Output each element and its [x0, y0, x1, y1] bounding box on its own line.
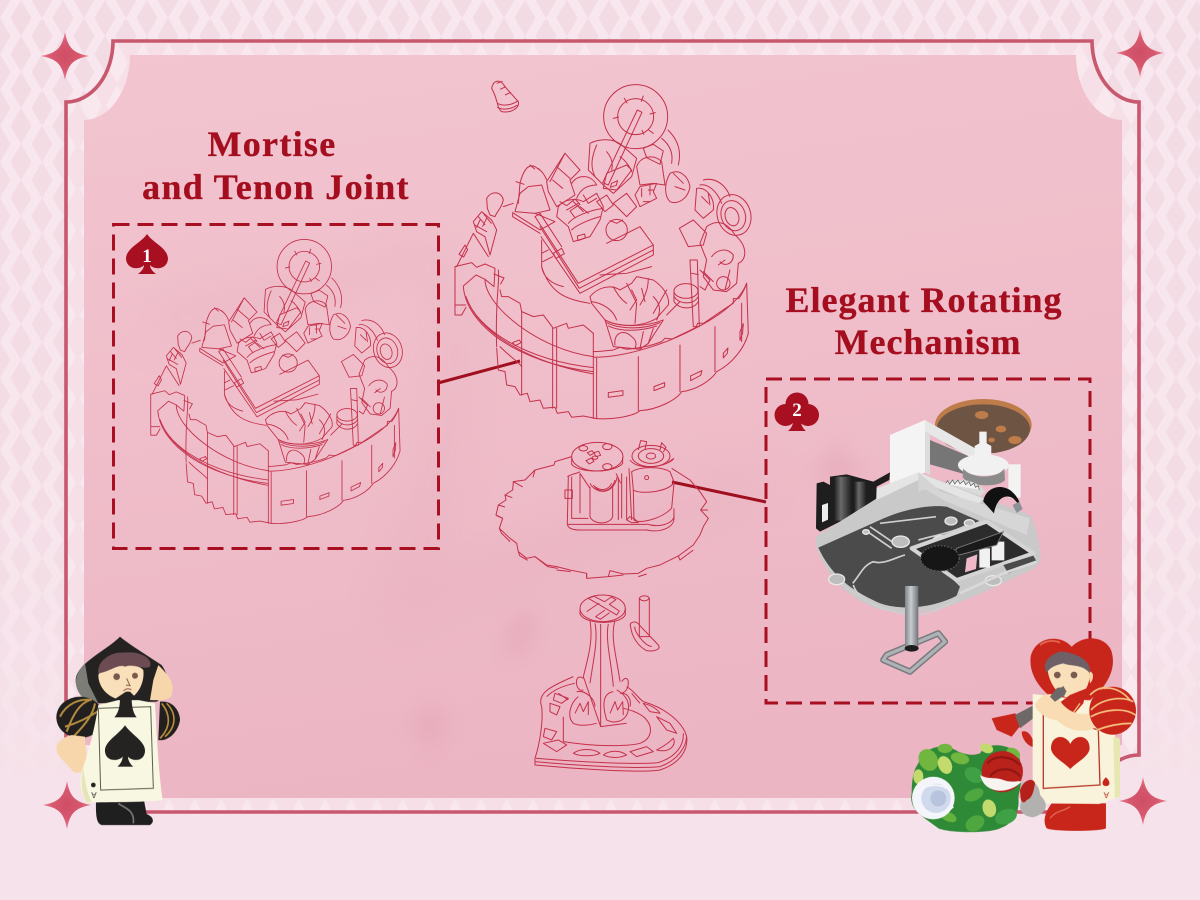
cross-top stem	[580, 595, 625, 622]
window	[912, 522, 1033, 580]
arms	[1035, 694, 1097, 731]
handle	[639, 596, 649, 637]
heading: Mortise and Tenon Joint	[142, 124, 410, 207]
heart base	[535, 677, 687, 771]
card heart	[1051, 737, 1090, 769]
badge: club 2: 2	[792, 400, 802, 421]
face	[1047, 661, 1090, 699]
frame outline	[66, 41, 1139, 812]
exploded model: top assembly line art	[455, 81, 756, 419]
comb frame and gears	[567, 472, 648, 530]
card ace mark	[1103, 777, 1109, 799]
crown gear	[943, 480, 985, 500]
white rose	[912, 777, 955, 819]
small floating part	[492, 81, 519, 112]
badge: spade 1: 1	[142, 246, 152, 267]
main frame	[816, 472, 1041, 613]
face	[98, 665, 144, 700]
zoomed line art of assembled ring	[151, 239, 407, 523]
base plate dark	[818, 506, 979, 607]
scalloped plate	[496, 457, 708, 578]
small ace mark	[91, 783, 97, 799]
spring barrel	[632, 468, 674, 492]
badge: spade 1	[126, 234, 168, 274]
right sleeve	[158, 701, 180, 740]
dashed box 2	[766, 379, 1090, 703]
plate light details	[830, 517, 970, 615]
puffed sleeve	[1089, 687, 1136, 735]
brown disc	[935, 399, 1032, 451]
mechanism illustration	[816, 399, 1041, 672]
winding key	[883, 586, 945, 672]
white post	[1008, 464, 1021, 498]
grey stone	[1020, 781, 1046, 817]
eyes and mouth	[113, 673, 120, 680]
hood	[76, 637, 168, 703]
stem scrolls	[570, 677, 629, 725]
boots	[1045, 803, 1106, 831]
connector line: joint box to ring	[438, 361, 520, 383]
dashed box 1	[114, 224, 438, 548]
screw holes	[829, 517, 1001, 586]
red rose	[982, 751, 1023, 792]
top cog	[632, 445, 670, 467]
heart hood	[1030, 638, 1113, 703]
boots	[96, 797, 153, 825]
red drip	[1020, 780, 1035, 802]
collar spade	[113, 692, 138, 717]
heading: Elegant Rotating Mechanism: Mechanism	[835, 322, 1021, 362]
character: heart card soldier with roses	[911, 638, 1136, 835]
raised arm	[150, 665, 173, 700]
exploded model: music box and base plate	[496, 441, 708, 771]
axe	[992, 713, 1025, 737]
hair	[98, 652, 151, 673]
cap gear	[958, 454, 1009, 476]
microphone hand top	[1050, 688, 1065, 702]
cylinder drum	[572, 442, 623, 471]
lower arm	[56, 735, 87, 773]
small ace mark: A	[91, 790, 97, 799]
heading: Elegant Rotating Mechanism: Elegant Rotating	[786, 280, 1062, 320]
decorative frame	[66, 41, 1139, 812]
connector line: mechanism to box	[672, 482, 766, 502]
heading: Mortise and Tenon Joint: and Tenon Joint	[142, 167, 410, 207]
left rollers	[816, 472, 890, 532]
badge: club 2	[774, 392, 819, 431]
card ace mark: A	[1103, 790, 1109, 799]
black rubber wheel	[983, 487, 1021, 513]
right sleeve back	[1022, 731, 1035, 747]
hair	[1045, 651, 1090, 673]
heading: Elegant Rotating Mechanism	[786, 280, 1062, 362]
spindle	[975, 432, 991, 459]
card spade	[105, 725, 145, 767]
frame band	[66, 41, 1139, 812]
card	[1033, 694, 1120, 804]
heading: Mortise and Tenon Joint: Mortise	[207, 124, 337, 164]
panel background	[84, 55, 1122, 798]
card	[80, 700, 163, 803]
character: spade card soldier	[56, 637, 180, 825]
white bracket	[890, 420, 925, 488]
bush	[911, 745, 1021, 832]
left sleeve	[56, 697, 104, 738]
collar and chest	[1057, 688, 1087, 717]
